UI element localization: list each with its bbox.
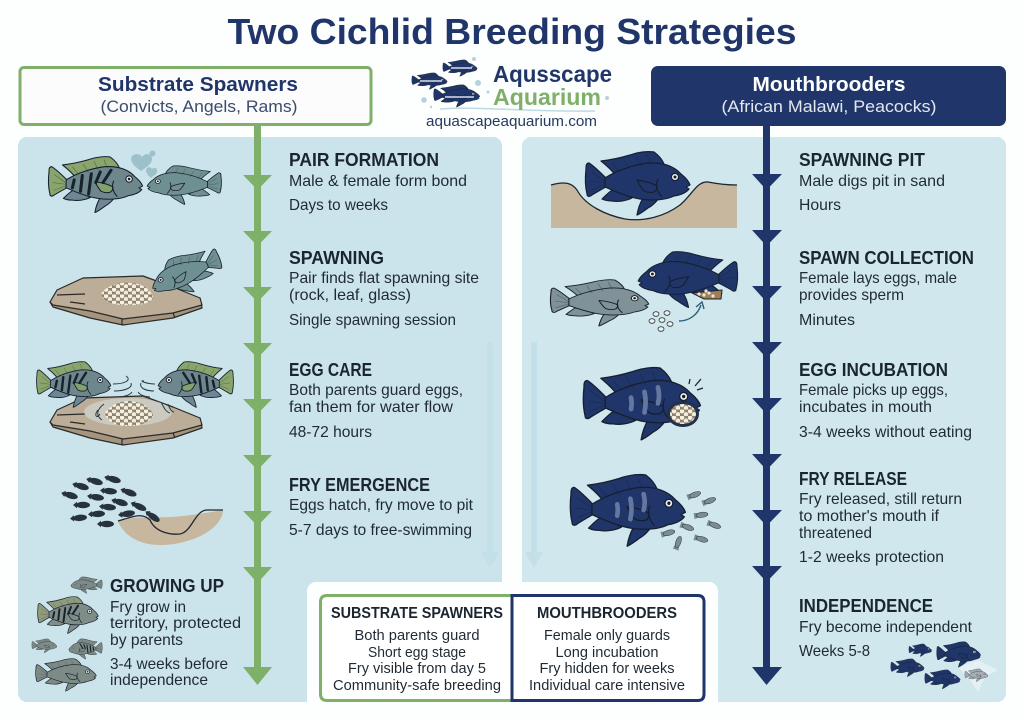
text: fry emergence: 5-7 days to free-swimming	[289, 522, 472, 539]
text: fry release: Fry released, still return	[799, 491, 962, 508]
text: independence: Fry become independent	[799, 619, 973, 636]
logo name second line: Aquarium	[493, 84, 601, 110]
header: substrate spawners: (Convicts, Angels, Rams)	[100, 97, 298, 116]
comparison box	[307, 582, 718, 718]
icon: pair of fish with hearts	[48, 150, 221, 212]
text: egg incubation: 3-4 weeks without eating	[799, 424, 972, 441]
icon: independent young fish	[891, 642, 998, 692]
text: growing up: independence	[110, 672, 208, 689]
text: spawn collection: provides sperm	[799, 287, 904, 304]
text: fry emergence: FRY EMERGENCE	[289, 475, 430, 495]
comparison: mouthbrooders: Female only guards	[544, 628, 670, 644]
comparison: substrate spawners: Both parents guard	[354, 628, 480, 644]
comparison: mouthbrooders: Long incubation	[556, 645, 658, 661]
text: spawning: (rock, leaf, glass)	[289, 287, 411, 304]
text: spawn collection: Female lays eggs, male	[799, 270, 957, 287]
comparison: mouthbrooders: MOUTHBROODERS	[537, 605, 677, 622]
icon: logo fish	[412, 60, 480, 107]
comparison: substrate spawners	[320, 596, 512, 700]
text: spawning pit: Male digs pit in sand	[799, 173, 945, 190]
logo name: Aqusscape	[493, 61, 612, 87]
text: spawn collection	[799, 248, 974, 329]
text: growing up: Fry grow in	[110, 599, 186, 616]
text: spawning: SPAWNING	[289, 248, 384, 268]
icon: fish spawning on rock	[50, 242, 228, 325]
icon: female releasing fry	[570, 475, 722, 551]
text: spawning	[289, 248, 479, 329]
comparison: substrate spawners: Short egg stage	[368, 645, 466, 661]
text: spawning pit	[799, 150, 945, 214]
text: fry release: FRY RELEASE	[799, 469, 907, 489]
comparison: substrate spawners: Community-safe breeding	[333, 678, 501, 694]
icon: male in spawning pit	[551, 152, 737, 228]
header: mouthbrooders	[651, 66, 1006, 126]
text: spawn collection: Minutes	[799, 312, 855, 329]
title: Two Cichlid Breeding Strategies	[228, 11, 796, 52]
text: spawning pit: Hours	[799, 197, 841, 214]
arrow: eggs to mouth	[679, 302, 704, 321]
text: egg care	[289, 360, 463, 441]
text: fry release: threatened	[799, 525, 872, 542]
text: fry emergence: Eggs hatch, fry move to pit	[289, 497, 474, 514]
text: fry release: to mother's mouth if	[799, 508, 940, 525]
icon: female incubating eggs in mouth	[583, 368, 703, 440]
text: fry emergence	[289, 475, 474, 539]
text: egg care: Both parents guard eggs,	[289, 382, 463, 399]
text: spawning: Single spawning session	[289, 312, 456, 329]
text: egg incubation: EGG INCUBATION	[799, 360, 948, 380]
text: independence	[799, 596, 973, 660]
logo	[412, 57, 612, 130]
faint down arrow: right panel	[525, 342, 543, 568]
text: pair formation: Days to weeks	[289, 197, 388, 214]
text: pair formation: PAIR FORMATION	[289, 150, 439, 170]
comparison: mouthbrooders	[512, 596, 704, 700]
faint down arrow: left panel	[481, 342, 499, 568]
panel: mouthbrooders background	[522, 137, 1006, 702]
text: independence: Weeks 5-8	[799, 643, 870, 660]
comparison: substrate spawners: Fry visible from day 5	[348, 661, 486, 677]
text: spawning pit: SPAWNING PIT	[799, 150, 925, 170]
comparison: substrate spawners: SUBSTRATE SPAWNERS	[331, 605, 503, 622]
text: growing up: GROWING UP	[110, 576, 224, 596]
comparison: mouthbrooders: Fry hidden for weeks	[540, 661, 674, 677]
text: pair formation	[289, 150, 467, 214]
text: pair formation: Male & female form bond	[289, 173, 467, 190]
text: independence: INDEPENDENCE	[799, 596, 933, 616]
header: mouthbrooders: Mouthbrooders	[752, 74, 906, 96]
text: fry release: 1-2 weeks protection	[799, 549, 944, 566]
header: substrate spawners: Substrate Spawners	[98, 74, 298, 96]
text: egg incubation	[799, 360, 972, 441]
header: mouthbrooders: (African Malawi, Peacocks)	[722, 97, 936, 116]
text: growing up: territory, protected	[110, 615, 241, 632]
header: substrate spawners	[20, 68, 371, 124]
comparison: mouthbrooders: Individual care intensive	[529, 678, 685, 694]
logo wave	[440, 108, 595, 111]
text: egg care: 48-72 hours	[289, 424, 372, 441]
text: egg care: EGG CARE	[289, 360, 372, 380]
icon: fry swimming from pit	[60, 474, 223, 545]
icon: logo bubbles	[421, 57, 609, 108]
panel: substrate spawners background	[18, 137, 502, 702]
icon: female lays, male collects eggs	[550, 252, 738, 331]
icon: parents fanning eggs	[37, 362, 233, 445]
text: fry release	[799, 469, 962, 566]
text: spawning: Pair finds flat spawning site	[289, 270, 479, 287]
arrow: substrate timeline	[243, 125, 272, 685]
logo url: aquascapeaquarium.com	[426, 114, 597, 130]
text: egg care: fan them for water flow	[289, 399, 453, 416]
icon: juveniles growing up	[32, 577, 102, 691]
text: growing up: by parents	[110, 632, 183, 649]
text: spawn collection: SPAWN COLLECTION	[799, 248, 974, 268]
text: growing up: 3-4 weeks before	[110, 656, 228, 673]
text: egg incubation: incubates in mouth	[799, 399, 932, 416]
text: egg incubation: Female picks up eggs,	[799, 382, 948, 399]
text: growing up	[110, 576, 241, 689]
arrow: mouthbrooder timeline	[752, 126, 782, 685]
